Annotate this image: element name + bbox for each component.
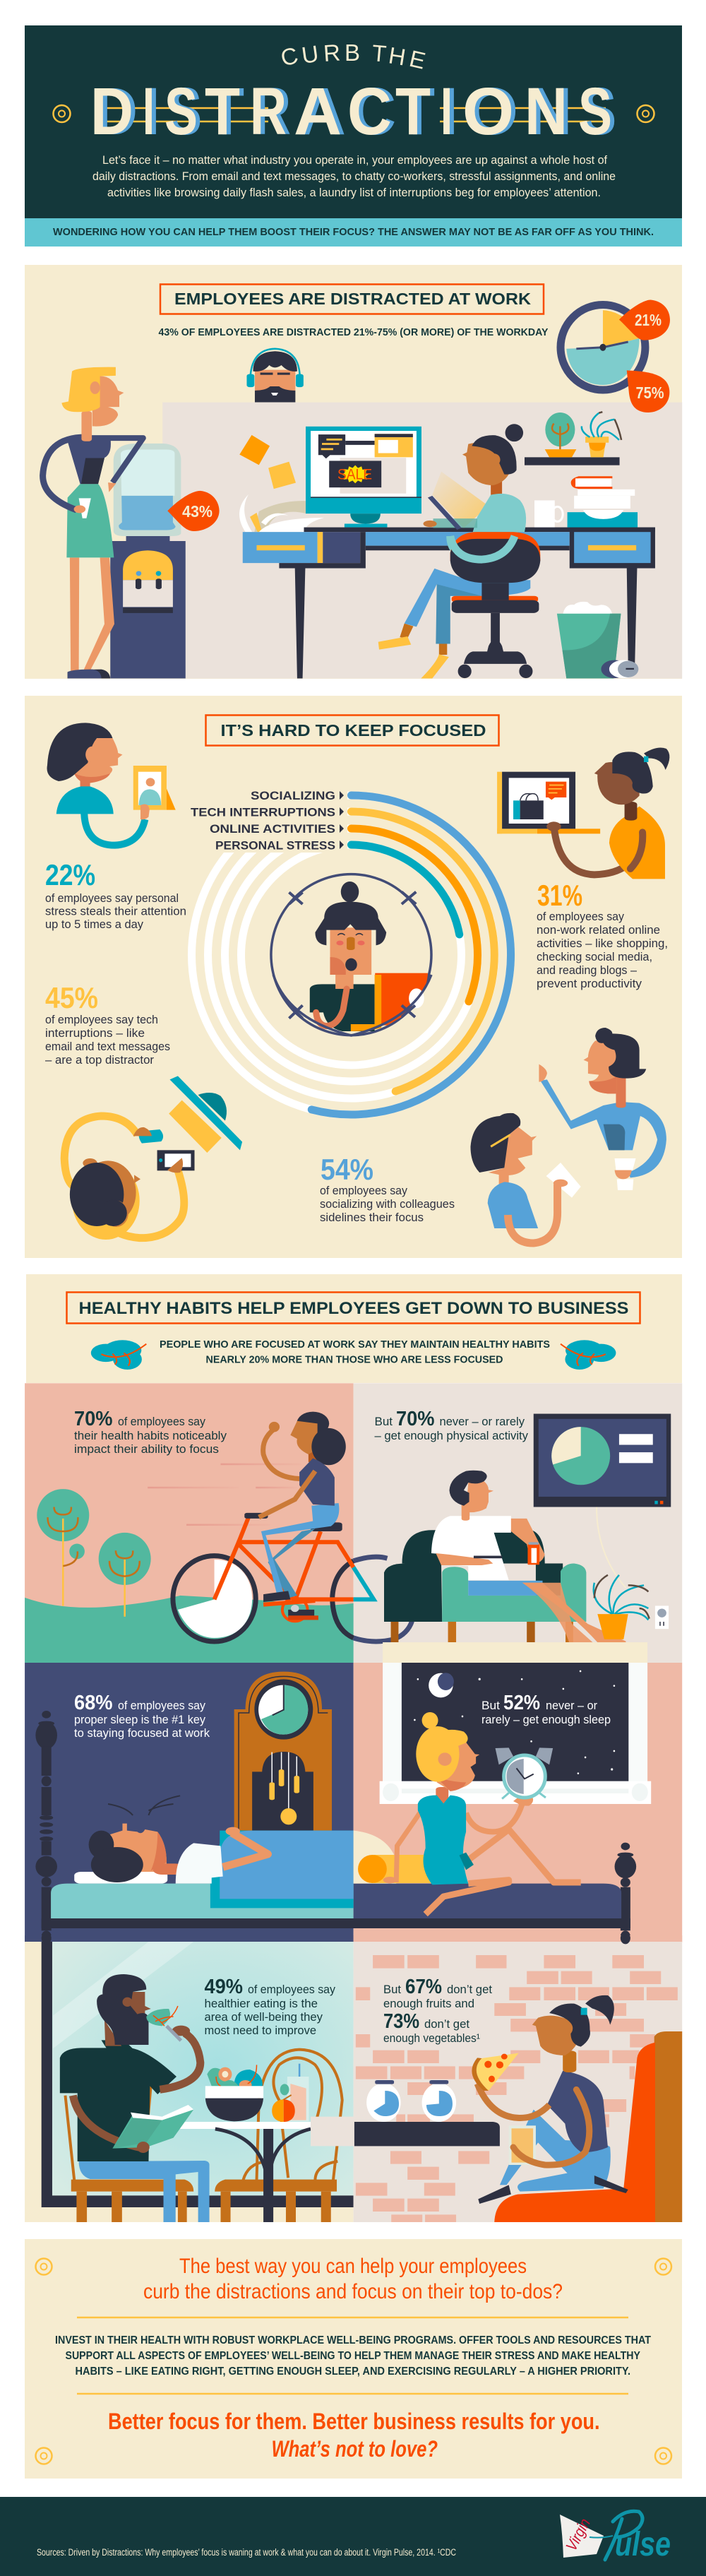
stat: 70% never exercise: 70% — [396, 1408, 435, 1430]
title: curb the: R — [323, 39, 341, 66]
stat: 70% health habits — [74, 1408, 227, 1456]
title: distractions shadow: I — [445, 74, 457, 149]
closing line — [108, 2409, 600, 2462]
subheading: PEOPLE WHO ARE FOCUSED AT WORK SAY THEY MAINTAIN HEALTHY HABITS — [160, 1339, 550, 1351]
stat: 31% online activities: of employees say — [537, 910, 625, 923]
title: curb the: T — [371, 40, 388, 67]
title: curb the: U — [300, 40, 321, 69]
panel: healthy eating — [25, 1933, 682, 2222]
title: distractions: T — [395, 74, 431, 149]
icon: trash can — [557, 602, 638, 679]
illustration: upper figures and center person — [47, 723, 669, 1035]
stat: 68% sleep — [74, 1692, 210, 1740]
icon: grandfather clock — [234, 1672, 332, 1831]
callout: 43% tag — [167, 491, 220, 531]
stat: 31% online activities: checking social media, — [537, 951, 652, 963]
stat: 70% health habits: 70% — [74, 1408, 113, 1430]
logo: virgin pulse: Virgin — [562, 2515, 594, 2553]
panel: header — [25, 25, 682, 218]
stat: 49% healthier eating: healthier eating is the — [205, 1997, 318, 2010]
illustration: lower figures and center person body — [64, 975, 666, 1243]
stat: 67% and 73% fruits and vegetables: enough vegetables¹ — [383, 2031, 480, 2045]
panel: healthy habits heading — [26, 1274, 682, 1383]
stat: 49% healthier eating: of employees say — [248, 1983, 335, 1996]
stat: 70% never exercise: – get enough physical activity — [374, 1429, 528, 1442]
closing line: Better focus for them. Better business results for you. — [108, 2409, 600, 2434]
icon: papers — [239, 494, 324, 532]
icon: woman at desk with tablet — [423, 424, 526, 559]
title: distractions shadow: D — [95, 74, 138, 149]
heading: it's hard to keep focused: IT’S HARD TO KEEP FOCUSED — [220, 721, 486, 740]
stat: 45% tech interruptions — [45, 981, 170, 1067]
icon: night window — [380, 1663, 651, 1804]
stat: 67% and 73% fruits and vegetables: 73% — [383, 2010, 419, 2033]
icon: bed — [42, 1831, 630, 1928]
ring: tech interruptions 45% — [352, 812, 494, 1091]
illustration: bed scene — [25, 1660, 682, 1942]
stat: 22% personal stress — [45, 858, 186, 931]
stat: 67% and 73% fruits and vegetables: don’t get — [447, 1983, 492, 1996]
icon: woman with alarm clock — [354, 1712, 581, 1914]
legend: ring labels: ONLINE ACTIVITIES — [210, 822, 335, 836]
icon: stressed person body — [273, 975, 431, 1035]
headline: best way: The best way you can help your employees — [179, 2255, 527, 2278]
icon: seats — [71, 2180, 337, 2222]
label: sale: SALE — [337, 466, 372, 483]
stat: 67% and 73% fruits and vegetables: don’t get — [424, 2017, 469, 2031]
closing line: What’s not to love? — [271, 2436, 438, 2462]
title: distractions shadow: T — [209, 74, 244, 149]
label: 21%: 21% — [635, 311, 662, 329]
icon: desk — [243, 528, 655, 679]
intro paragraph: Let’s face it – no matter what industry you operate in, your employees are up against a whole host of — [102, 153, 607, 167]
footer band — [0, 2497, 706, 2576]
intro paragraph: activities like browsing daily flash sales, a laundry list of interruptions beg for employees’ attention. — [107, 186, 601, 199]
icon: bedposts — [35, 1711, 636, 1942]
heading: it's hard to keep focused — [206, 715, 498, 746]
stat: 70% health habits: of employees say — [118, 1415, 205, 1428]
stat: 54% socializing: of employees say — [320, 1185, 408, 1197]
subheading — [160, 1339, 550, 1366]
stat: 22% personal stress: of employees say personal — [45, 892, 179, 905]
title: curb the — [278, 39, 428, 74]
icon: woman eating pizza — [472, 1995, 628, 2204]
title: distractions shadow: C — [352, 74, 396, 149]
illustration: office scene — [43, 299, 682, 679]
stat: 22% personal stress: stress steals their attention — [45, 906, 186, 918]
brick wall — [356, 1955, 678, 2222]
title: curb the: H — [387, 42, 407, 71]
icon: office chair — [378, 532, 540, 679]
ring: socializing 54% — [311, 795, 511, 1115]
legend: ring labels: SOCIALIZING — [251, 789, 335, 802]
stat: 31% online activities: activities – like shopping, — [537, 937, 668, 950]
title: distractions: T — [205, 74, 240, 149]
ring: personal stress 22% — [352, 845, 460, 934]
stat: 49% healthier eating — [205, 1976, 335, 2037]
icon: clock ring around person — [271, 874, 431, 1035]
logo: virgin pulse: ulse — [615, 2526, 671, 2563]
icon: man raising hand — [539, 1028, 666, 1190]
teal question band — [25, 218, 682, 247]
intro paragraph — [92, 153, 616, 199]
title: distractions: A — [294, 74, 342, 149]
decorative rings and rules — [35, 2259, 671, 2464]
stat: 67% and 73% fruits and vegetables: 67% — [405, 1976, 442, 1998]
heading: healthy habits — [66, 1293, 640, 1324]
heading: employees are distracted at work — [160, 284, 544, 314]
icon: sleeping man — [74, 1796, 268, 1884]
stat: 31% online activities: prevent productivity — [537, 978, 642, 990]
stat: 54% socializing: sidelines their focus — [320, 1211, 424, 1224]
icon: computer monitor — [306, 427, 421, 528]
title: distractions shadow: R — [254, 74, 291, 149]
stat: 22% personal stress: 22% — [45, 858, 95, 891]
stat: 70% never exercise: But — [374, 1415, 393, 1428]
icon: sticky notes — [239, 435, 296, 489]
title: distractions: D — [90, 74, 133, 149]
sources: Sources: Driven by Distractions: Why employees’ focus is waning at work & what you can do about it. Virgin Pulse, 2014. ¹CDC — [37, 2547, 456, 2558]
icon: bicycle — [173, 1513, 412, 1642]
stat: 52% never enough sleep: But — [481, 1699, 500, 1712]
headline: best way: curb the distractions and focus on their top to-dos? — [143, 2280, 563, 2303]
recommendation paragraph: INVEST IN THEIR HEALTH WITH ROBUST WORKPLACE WELL-BEING PROGRAMS. OFFER TOOLS AND RESOURCES THAT — [55, 2334, 651, 2346]
panel: employees are distracted at work — [25, 265, 682, 679]
title: distractions: R — [250, 74, 287, 149]
legend: ring labels: PERSONAL STRESS — [215, 839, 335, 852]
logo: virgin pulse — [560, 2511, 671, 2563]
stat: 54% socializing: 54% — [321, 1153, 373, 1186]
stat: 31% online activities — [537, 879, 668, 990]
icon: woman with phone — [47, 723, 176, 845]
stat: 54% socializing — [320, 1153, 455, 1224]
callout: 75% tag — [627, 370, 669, 412]
title: curb the: B — [345, 40, 360, 66]
icon: man with headset — [246, 349, 304, 403]
icon: table and meal — [180, 2064, 311, 2222]
panel: physical activity — [25, 1383, 682, 1663]
title: distractions shadow: S — [169, 74, 202, 149]
icon: shelf and plants — [525, 412, 621, 465]
title: distractions — [90, 74, 612, 149]
title: curb the: E — [407, 45, 428, 74]
legend: ring labels — [191, 789, 344, 852]
title: distractions: I — [143, 74, 155, 149]
title: distractions: N — [525, 74, 568, 149]
icon: trees — [37, 1489, 151, 1617]
stat: 45% tech interruptions: email and text messages — [45, 1040, 170, 1053]
title: distractions shadow: T — [400, 74, 435, 149]
stat: 49% healthier eating: 49% — [205, 1976, 243, 1998]
title: distractions shadow: I — [147, 74, 159, 149]
title: distractions shadow: S — [582, 74, 616, 149]
icon: woman with cup — [43, 367, 143, 679]
icon: potted plant and outlet — [594, 1575, 669, 1639]
title: distractions: S — [164, 74, 198, 149]
stat: 68% sleep: proper sleep is the #1 key — [74, 1713, 205, 1726]
stat: 70% never exercise — [374, 1408, 528, 1442]
ring: online activities 31% — [352, 829, 477, 1002]
callout: 21% tag — [619, 299, 670, 340]
stat: 52% never enough sleep: rarely – get enough sleep — [481, 1713, 611, 1726]
icon: television — [534, 1414, 671, 1588]
icon: stressed person — [315, 882, 428, 975]
title: curb the: C — [278, 42, 301, 71]
recommendation paragraph: SUPPORT ALL ASPECTS OF EMPLOYEES’ WELL-BEING TO HELP THEM MANAGE THEIR STRESS AND MAKE HEALTHY — [65, 2350, 641, 2362]
stat: 49% healthier eating: area of well-being they — [205, 2010, 323, 2024]
icon: counter and milk bottles — [311, 2080, 500, 2146]
stat: 45% tech interruptions: of employees say tech — [45, 1014, 158, 1026]
title: distractions shadow: A — [298, 74, 346, 149]
stat: 31% online activities: and reading blogs – — [537, 964, 638, 977]
title: distractions: S — [578, 74, 612, 149]
legend: ring labels: TECH INTERRUPTIONS — [191, 805, 335, 819]
icon: booth — [494, 2031, 682, 2222]
stat: 52% never enough sleep: never – or — [546, 1699, 597, 1712]
stat: 68% sleep: of employees say — [118, 1699, 205, 1712]
teal question band: WONDERING HOW YOU CAN HELP THEM BOOST THEIR FOCUS? THE ANSWER MAY NOT BE AS FAR OFF AS YOU THINK. — [53, 226, 654, 238]
label: 75%: 75% — [635, 384, 664, 402]
panel: sleep — [25, 1660, 682, 1942]
intro paragraph: daily distractions. From email and text messages, to chatty co-workers, stressful assignments, and online — [92, 170, 616, 183]
subheading: 43% stat: 43% OF EMPLOYEES ARE DISTRACTED 21%-75% (OR MORE) OF THE WORKDAY — [158, 327, 549, 338]
title: distractions shadow: N — [529, 74, 572, 149]
icon: books and tray — [534, 476, 638, 528]
headline: best way — [143, 2255, 563, 2303]
recommendation paragraph: HABITS – LIKE EATING RIGHT, GETTING ENOUGH SLEEP, AND EXERCISING REGULARLY – A HIGHER PRIORITY. — [75, 2366, 630, 2378]
icon: person with tablet top view — [64, 1076, 242, 1240]
title: distractions shadow — [95, 74, 616, 149]
stat: 68% sleep: to staying focused at work — [74, 1726, 210, 1740]
icon: left and right leaves — [91, 1340, 616, 1370]
heading: healthy habits: HEALTHY HABITS HELP EMPLOYEES GET DOWN TO BUSINESS — [79, 1299, 628, 1318]
stat: 45% tech interruptions: – are a top distractor — [45, 1054, 155, 1067]
stat: 70% never exercise: never – or rarely — [439, 1415, 525, 1428]
stat: 49% healthier eating: most need to improve — [205, 2024, 316, 2037]
illustration: bike and couch — [25, 1383, 682, 1663]
illustration: cafe scene — [25, 1933, 682, 2222]
panel: it's hard to keep focused — [25, 696, 682, 1258]
stat: 31% online activities: non-work related online — [537, 924, 660, 937]
stat: 70% health habits: their health habits noticeably — [74, 1429, 227, 1442]
stat: 67% and 73% fruits and vegetables: enough fruits and — [383, 1997, 474, 2010]
panel: conclusion — [25, 2239, 682, 2479]
stat: 45% tech interruptions: 45% — [45, 981, 98, 1014]
title: distractions shadow: O — [467, 74, 518, 149]
icon: man eating salad — [60, 1974, 210, 2222]
icon: cyclist — [259, 1412, 346, 1602]
decorative title lines and rings — [54, 105, 654, 122]
icon: water cooler — [110, 444, 186, 679]
stat: 52% never enough sleep: 52% — [503, 1692, 540, 1714]
stat: 22% personal stress: up to 5 times a day — [45, 918, 144, 931]
icon: woman with laptop — [497, 747, 669, 879]
recommendation paragraph — [55, 2334, 651, 2378]
stat: 67% and 73% fruits and vegetables: But — [383, 1983, 401, 1996]
stat: 31% online activities: 31% — [537, 879, 582, 912]
title: distractions: O — [462, 74, 514, 149]
title: distractions: I — [441, 74, 453, 149]
stat: 67% and 73% fruits and vegetables — [383, 1976, 492, 2045]
chart: concentric ring chart — [180, 785, 511, 1115]
icon: person with paper — [470, 1113, 581, 1243]
heading: employees are distracted at work: EMPLOYEES ARE DISTRACTED AT WORK — [174, 290, 531, 308]
stat: 52% never enough sleep — [481, 1692, 611, 1726]
speed lines — [148, 1464, 301, 1526]
stat: 70% health habits: impact their ability to focus — [74, 1442, 219, 1456]
icon: wall clock — [561, 304, 645, 390]
stat: 54% socializing: socializing with colleagues — [320, 1198, 455, 1211]
stat: 68% sleep: 68% — [74, 1692, 113, 1714]
title: distractions: C — [347, 74, 392, 149]
stat: 45% tech interruptions: interruptions – like — [45, 1027, 145, 1040]
icon: chairs — [65, 2050, 342, 2180]
icon: couch and man — [384, 1471, 626, 1644]
label: 43%: 43% — [182, 502, 213, 521]
subheading: NEARLY 20% MORE THAN THOSE WHO ARE LESS FOCUSED — [206, 1353, 503, 1366]
